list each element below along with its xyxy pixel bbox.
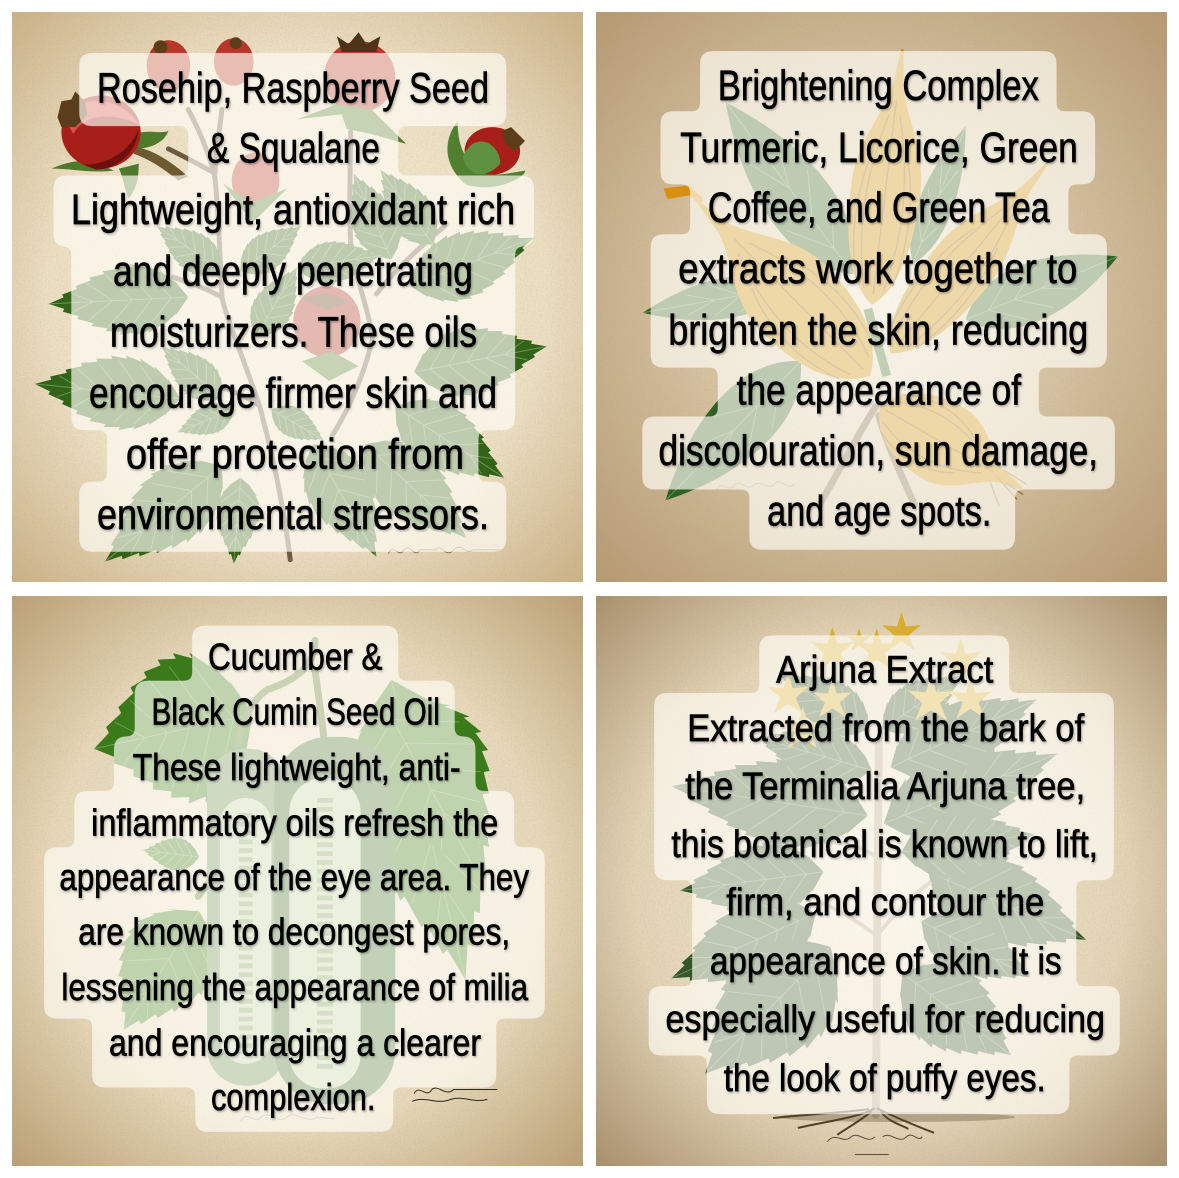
illustration: rose branch with hips [31, 32, 553, 591]
text: rosehip description: encourage firmer skin and [89, 370, 497, 417]
panel: arjuna extract [596, 596, 1167, 1166]
text: arjuna description [665, 649, 1105, 1100]
text: cucumber description: are known to decongest pores, [78, 912, 510, 954]
orange pod tip [663, 185, 703, 206]
text: brightening complex description: Coffee, and Green Tea [708, 184, 1050, 232]
illustration: cucumbers and leaves [78, 639, 537, 1121]
text: cucumber description: lessening the appearance of milia [61, 967, 529, 1009]
rose leaves [31, 156, 553, 591]
translucent text highlight [642, 51, 1115, 550]
panel: rosehip, raspberry seed and squalane [12, 12, 583, 591]
text: cucumber description: and encouraging a clearer [109, 1023, 481, 1064]
text: rosehip description: moisturizers. These oils [110, 309, 477, 357]
text: brightening complex description: the appearance of [737, 367, 1022, 415]
rose hips [52, 32, 525, 381]
left cucumber [207, 749, 286, 1086]
text: cucumber description: These lightweight, anti- [133, 748, 461, 789]
panel contents: arjuna [649, 612, 1120, 1155]
text: brightening complex description: Brightening Complex [718, 63, 1039, 110]
panel background: parchment [12, 596, 583, 1166]
text: arjuna description: firm, and contour the [726, 882, 1044, 924]
signature [717, 482, 794, 490]
text: brightening complex description [659, 63, 1098, 535]
arjuna leaves [655, 652, 1104, 1114]
text: rosehip description [71, 65, 515, 539]
turmeric leaves [639, 82, 1129, 523]
rootlets [990, 470, 1027, 506]
illustration: arjuna tree [655, 612, 1104, 1155]
arjuna flowers [767, 612, 991, 748]
right cucumber [274, 737, 395, 1104]
text: brightening complex description: brighten the skin, reducing [668, 307, 1088, 354]
text: rosehip description: offer protection from [126, 431, 464, 478]
arjuna trunk and branches [876, 739, 879, 1115]
botanical caption squiggle [827, 1135, 922, 1155]
text: arjuna description: the Terminalia Arjuna tree, [685, 765, 1085, 808]
signature [412, 1088, 497, 1101]
text: rosehip description: Rosehip, Raspberry Seed [97, 65, 489, 112]
text: arjuna description: this botanical is known to lift, [671, 824, 1098, 866]
text: rosehip description: and deeply penetrating [113, 248, 473, 295]
signature [388, 547, 500, 554]
text: rosehip description: & Squalane [207, 125, 380, 172]
text: arjuna description: Extracted from the bark of [687, 707, 1084, 750]
panel contents: brightening complex [639, 45, 1129, 550]
cucumber stem [198, 640, 324, 896]
text: brightening complex description: and age spots. [767, 488, 991, 535]
text: arjuna description: especially useful for reducing [665, 998, 1105, 1041]
text: brightening complex description: Turmeric, Licorice, Green [680, 125, 1078, 172]
translucent text highlight [44, 626, 545, 1132]
panel background: parchment [596, 596, 1167, 1166]
panel contents: cucumber [44, 626, 545, 1132]
text: cucumber description [59, 637, 529, 1119]
translucent text highlight [649, 635, 1120, 1114]
panel background: parchment [596, 12, 1167, 582]
ground shadow and roots [773, 1108, 1015, 1135]
panel: brightening complex [596, 12, 1167, 582]
text: arjuna description: the look of puffy eyes. [724, 1058, 1046, 1100]
signature lower [241, 1115, 335, 1121]
text: cucumber description: Cucumber & [208, 637, 382, 678]
illustration: turmeric roots and leaves [639, 45, 1129, 524]
panel: cucumber and black cumin seed oil [12, 596, 583, 1166]
text: cucumber description: inflammatory oils refresh the [91, 803, 498, 844]
text: brightening complex description: extracts work together to [678, 246, 1077, 293]
text: cucumber description: complexion. [211, 1077, 375, 1119]
turmeric pods [666, 45, 1074, 524]
text: cucumber description: Black Cumin Seed Oil [152, 692, 440, 733]
text: arjuna description: appearance of skin. It is [710, 940, 1061, 983]
text: rosehip description: Lightweight, antioxidant rich [71, 186, 515, 234]
text: rosehip description: environmental stressors. [97, 492, 489, 539]
text: brightening complex description: discolouration, sun damage, [659, 427, 1098, 475]
panel art: rosehip [31, 32, 553, 591]
translucent text highlight [53, 53, 534, 552]
cucumber leaves [78, 639, 537, 1056]
turmeric stems and rootlets [820, 407, 914, 504]
rose stems [168, 109, 445, 560]
panel background: parchment [12, 12, 583, 582]
text: arjuna description: Arjuna Extract [776, 649, 993, 692]
text: cucumber description: appearance of the eye area. They [59, 857, 529, 899]
